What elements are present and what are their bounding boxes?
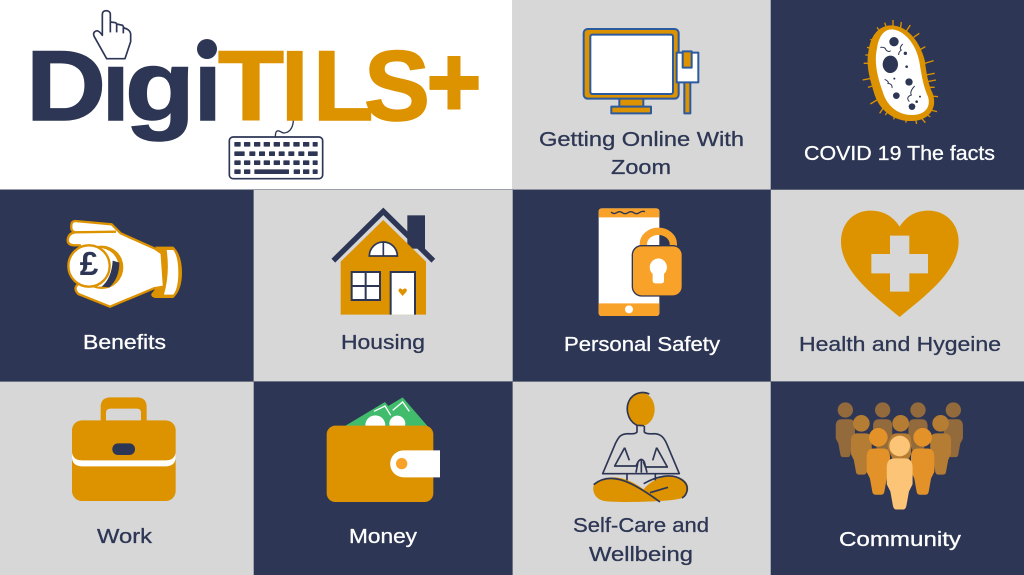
label: COVID 19 The facts: COVID 19 The facts xyxy=(804,142,995,165)
panel: Benefits xyxy=(0,190,253,381)
label: Self-Care and Wellbeing: Self-Care and xyxy=(573,514,709,537)
icon: pointing hand cursor xyxy=(94,11,131,59)
panel: COVID 19 The facts xyxy=(771,0,1024,189)
label: Community: Community xyxy=(839,528,962,551)
label: Self-Care and Wellbeing xyxy=(573,514,709,566)
panel: Health and Hygeine xyxy=(771,190,1024,381)
logo wordmark xyxy=(26,26,481,141)
label: Work: Work xyxy=(97,525,153,548)
icon: briefcase xyxy=(72,397,176,501)
logo wordmark: + xyxy=(427,26,481,137)
icon: keyboard xyxy=(229,121,323,179)
logo wordmark: T xyxy=(218,30,284,141)
label: Money: Money xyxy=(349,525,418,548)
panel: Getting Online With Zoom xyxy=(513,0,770,189)
label: Personal Safety: Personal Safety xyxy=(564,333,721,356)
label: Health and Hygeine: Health and Hygeine xyxy=(799,333,1001,356)
label: Getting Online With Zoom xyxy=(539,128,744,179)
panel: DigiTILS+ logo xyxy=(0,0,512,189)
icon: meditating person xyxy=(593,392,688,502)
logo wordmark: i xyxy=(194,30,222,141)
logo wordmark: L xyxy=(313,30,373,141)
label: Self-Care and Wellbeing: Wellbeing xyxy=(589,543,693,566)
panel: Work xyxy=(0,382,254,575)
logo wordmark: D xyxy=(26,30,106,141)
panel: Personal Safety xyxy=(513,190,770,381)
label: Getting Online With Zoom: Zoom xyxy=(611,156,671,179)
icon: hand holding pound coin xyxy=(68,221,182,307)
label: Getting Online With Zoom: Getting Online With xyxy=(539,128,744,151)
icon: wallet with banknotes xyxy=(327,397,440,502)
logo wordmark: I xyxy=(281,30,309,141)
label: Housing: Housing xyxy=(341,331,425,354)
icon: hand holding pound coin: £ xyxy=(80,246,99,283)
icon: computer monitor with cable xyxy=(584,29,698,113)
panel: Housing xyxy=(254,190,512,381)
icon: crowd of people xyxy=(836,402,963,510)
icon: phone with padlock xyxy=(599,208,682,316)
panel: Community xyxy=(771,382,1024,575)
icon: bacterium xyxy=(863,20,938,124)
icon: heart with cross xyxy=(841,211,959,317)
logo wordmark: i xyxy=(102,30,130,141)
panel: Money xyxy=(254,382,512,575)
panel: Self-Care and Wellbeing xyxy=(513,382,770,575)
logo wordmark: S xyxy=(364,30,430,141)
logo wordmark: g xyxy=(125,30,195,141)
icon: house xyxy=(333,211,433,315)
label: Benefits: Benefits xyxy=(83,331,166,354)
